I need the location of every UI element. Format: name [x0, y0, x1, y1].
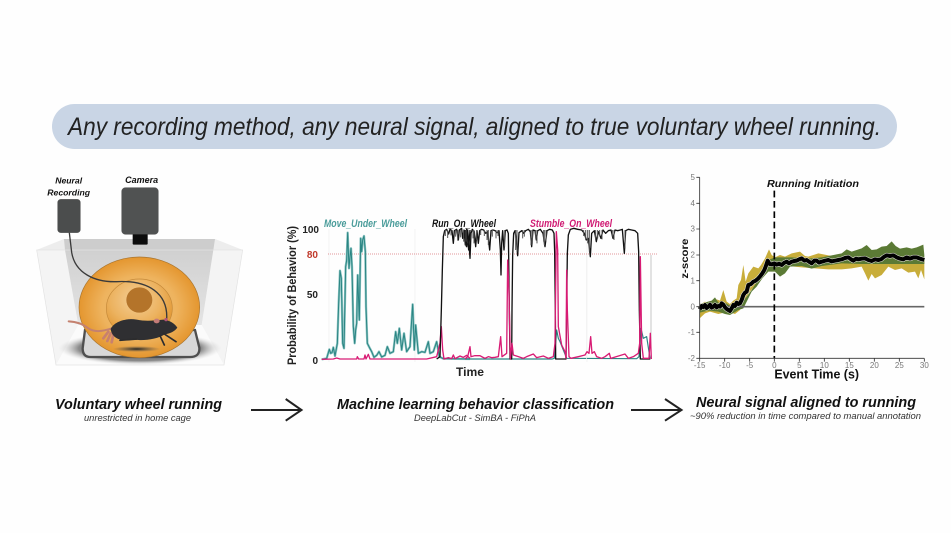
caption: neural signal: ~90% reduction in time compared to manual annotation [690, 411, 921, 422]
caption: voluntary wheel running: unrestricted in home cage [84, 413, 191, 424]
icon: mouse [69, 318, 177, 345]
y tick labels: -1 [688, 328, 696, 337]
panel: wheel running setup [37, 175, 243, 365]
caption: neural signal: Neural signal aligned to running [696, 394, 916, 411]
label: camera: Camera [125, 175, 158, 185]
green signal band [700, 241, 924, 315]
traces [322, 228, 651, 359]
label: neural recording: Recording [47, 188, 91, 198]
x tick labels: 20 [870, 361, 879, 370]
x tick labels: 10 [820, 361, 829, 370]
icon: neural recording device [58, 199, 80, 233]
x axis title: Event Time (s) [774, 368, 859, 382]
arrow: first [251, 399, 302, 421]
y axis numbers: 50 [307, 290, 318, 301]
x tick labels: 25 [895, 361, 904, 370]
panel: z-score chart [680, 173, 929, 382]
label: neural recording: Neural [55, 175, 83, 185]
y tick labels: 2 [691, 251, 696, 260]
y axis title: Probability of Behavior (%) [287, 226, 299, 365]
x tick labels: -5 [746, 361, 754, 370]
running wheel [79, 257, 200, 358]
x tick labels [694, 361, 929, 370]
y tick labels: 5 [691, 173, 696, 182]
y axis numbers: 80 [307, 250, 318, 261]
icon: camera [122, 188, 158, 245]
label: neural recording [47, 175, 91, 198]
cage [37, 239, 243, 365]
x axis title: Time [456, 367, 484, 379]
wheel stand [83, 330, 199, 357]
x tick labels: 15 [845, 361, 854, 370]
y tick labels [688, 173, 696, 363]
baseline [700, 304, 924, 309]
label: run on wheel: Run_On_Wheel [432, 218, 497, 230]
x tick labels: 30 [920, 361, 929, 370]
axes [696, 177, 924, 362]
caption: voluntary wheel running [55, 396, 222, 424]
chart grid [329, 229, 587, 362]
caption: neural signal [690, 394, 921, 422]
y axis numbers: 100 [302, 225, 319, 236]
y tick labels: 3 [691, 225, 696, 234]
label: move under wheel: Move_Under_Wheel [324, 218, 408, 230]
panel: behavior classification chart [287, 218, 657, 379]
y axis numbers [302, 225, 319, 367]
mouse shadow [113, 346, 161, 352]
x tick labels: 5 [797, 361, 802, 370]
mean signal line [700, 255, 924, 311]
y axis title: z-score [680, 238, 691, 279]
caption: machine learning: DeepLabCut - SimBA - FiPhA [414, 413, 536, 424]
y tick labels: 1 [691, 276, 696, 285]
x tick labels: -10 [719, 361, 731, 370]
x tick labels: -15 [694, 361, 706, 370]
threshold line [328, 253, 657, 255]
recording cable [69, 233, 167, 320]
y tick labels: 0 [691, 302, 696, 311]
y tick labels: -2 [688, 354, 696, 363]
onset dashed line [772, 191, 777, 358]
caption: machine learning: Machine learning behavior classification [337, 396, 614, 413]
arrow: second [631, 399, 682, 421]
title banner: Any recording method, any neural signal, aligned to true voluntary wheel running. [66, 113, 881, 141]
title banner [52, 104, 897, 149]
caption: voluntary wheel running: Voluntary wheel running [55, 396, 222, 413]
x tick labels: 0 [772, 361, 777, 370]
y axis numbers: 0 [312, 356, 318, 367]
y tick labels: 4 [691, 199, 696, 208]
label: stumble on wheel: Stumble_On_Wheel [530, 218, 613, 230]
gold signal band [700, 249, 924, 318]
caption: machine learning [337, 396, 614, 424]
label: running initiation: Running Initiation [767, 179, 859, 190]
